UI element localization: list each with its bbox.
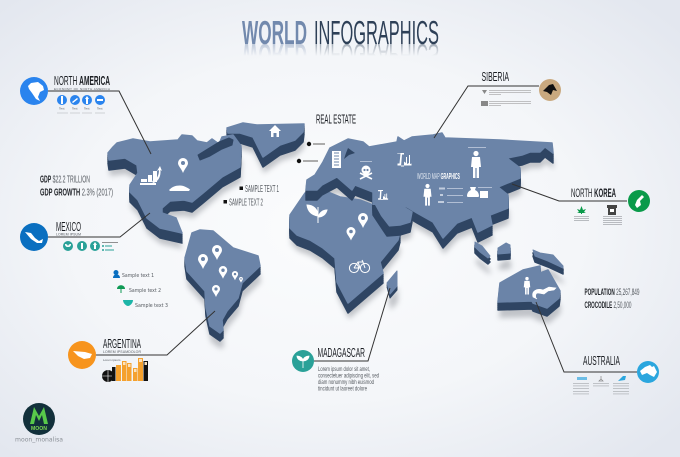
heading: MADAGASCAR <box>318 345 365 360</box>
stats: GDP <box>40 174 113 198</box>
icon: oil factory small <box>378 190 388 200</box>
icon: growth chart <box>140 166 162 185</box>
icon: shop <box>607 205 617 215</box>
paragraph: diam nonummy nibh euismod <box>318 379 374 386</box>
icon: Madagascar badge <box>292 350 314 372</box>
leader line <box>434 86 539 138</box>
icon: building <box>332 151 341 168</box>
landmass: Greenland <box>227 123 304 167</box>
mini text blocks <box>574 216 622 225</box>
mini labels: Text <box>97 106 103 110</box>
landmass: Madagascar <box>387 271 397 298</box>
text: REAL ESTATE <box>316 112 356 126</box>
legend: sample texts <box>113 270 168 309</box>
map tiny labels <box>360 147 492 203</box>
icon: North Korea badge <box>628 190 650 212</box>
mini icons <box>577 376 626 381</box>
stats: GDP: GDP $22.2 TRILLION <box>40 174 90 186</box>
icon: car <box>169 186 190 191</box>
icon: person medium <box>424 184 432 206</box>
mini icon glyphs <box>65 242 97 249</box>
paragraph: consectetuer adipiscing elit, sed <box>318 372 379 380</box>
mini labels: Text <box>59 106 65 110</box>
stats: GDP: GDP GROWTH 2.3% (2017) <box>40 188 113 198</box>
legend: sample texts: Sample text 1 <box>122 273 154 279</box>
mini legend <box>102 242 118 251</box>
subheading: ECONOMY OF NORTH AMERICA <box>54 87 110 91</box>
heading: NORTH AMERICA <box>54 74 110 88</box>
logo: moon_monalisa <box>15 403 63 444</box>
icon: money bags <box>467 187 488 198</box>
landmass: Africa <box>290 190 400 313</box>
icon: Australia badge <box>637 361 659 383</box>
title reflection: WORLD <box>242 37 307 74</box>
paragraph <box>318 366 379 392</box>
mini rules <box>57 112 105 114</box>
icon: location pins <box>178 158 368 297</box>
text: SAMPLE TEXT 1 <box>245 184 279 195</box>
text: INFOGRAPHICS <box>314 14 439 51</box>
landmass: Indonesian islands <box>475 242 563 274</box>
stats: Australia: CROCODILE 2,50,000 <box>584 300 632 310</box>
mini icons <box>57 95 105 105</box>
mini row 2 <box>481 101 531 106</box>
icon: person <box>113 270 120 278</box>
Baltic inlet <box>344 148 355 159</box>
bar chart <box>102 358 148 382</box>
leader line <box>96 311 215 355</box>
mini icon glyphs <box>61 96 103 104</box>
icon: person Australia <box>524 277 530 295</box>
heading: NORTH KOREA <box>571 186 616 200</box>
text: INFOGRAPHICS <box>314 37 439 74</box>
callout: Mexico <box>20 213 150 251</box>
mini text blocks <box>573 383 629 394</box>
callout: Argentina <box>68 311 215 382</box>
stats: Australia: POPULATION 25,267,849 <box>584 287 640 297</box>
leader line <box>314 288 390 361</box>
landmass: Eurasia <box>306 133 553 248</box>
icon: Mexico badge <box>20 223 48 251</box>
icon: cannabis leaf <box>577 206 586 214</box>
Red Sea <box>372 205 391 229</box>
heading: AUSTRALIA <box>583 354 620 368</box>
world map <box>108 123 564 349</box>
title <box>242 20 438 55</box>
icon: bicycle <box>349 260 370 273</box>
icon: house <box>269 125 281 137</box>
icon: Siberia badge <box>539 79 561 101</box>
leader line <box>536 302 637 372</box>
callout: Australia <box>536 302 659 394</box>
title reflection <box>244 44 438 55</box>
callout: North America <box>20 74 151 154</box>
mini icons <box>63 241 100 251</box>
sample labels <box>224 184 279 208</box>
logo: moon_monalisa: MOON <box>31 426 47 432</box>
mini labels: Text <box>72 106 78 110</box>
icon: Argentina badge <box>68 341 96 369</box>
paragraph: Lorem ipsum dolor sit amet, <box>318 366 370 373</box>
icon: teal shape <box>123 300 133 306</box>
real estate markers <box>297 142 325 163</box>
paragraph: tincidunt ut laoreet dolore <box>318 386 367 392</box>
landmass: North America <box>108 135 241 243</box>
callout: Madagascar <box>292 288 390 392</box>
bar chart: Lorem ipsum <box>103 358 121 362</box>
leader line <box>48 91 151 154</box>
icon: umbrella <box>117 285 125 293</box>
callout: North Korea <box>512 184 650 225</box>
icon: skull and crossbones <box>360 166 372 179</box>
mini labels: Text <box>84 106 90 110</box>
map shadow <box>109 139 564 349</box>
icon: person large <box>471 151 481 178</box>
callout: Siberia <box>434 69 561 138</box>
Hudson Bay <box>198 138 233 160</box>
heading: SIBERIA <box>482 69 509 84</box>
map icons <box>140 125 556 299</box>
leader line <box>512 184 627 201</box>
map label: world map graphics: WORLD MAP GRAPHICS <box>417 172 460 181</box>
icon: leaf sprout <box>307 205 327 223</box>
subheading: LOREM IPSUMDOLOR <box>103 350 141 354</box>
mini labels <box>59 106 103 110</box>
heading: ARGENTINA <box>103 337 141 351</box>
legend: sample texts: Sample text 3 <box>135 303 168 309</box>
logo: moon_monalisa: moon_monalisa <box>15 436 63 444</box>
leader line <box>48 213 150 237</box>
icon: North America badge <box>20 77 48 105</box>
legend: sample texts: Sample text 2 <box>129 288 161 294</box>
stats: Australia <box>584 287 640 310</box>
callout: Mexico: MEXICO <box>56 219 81 234</box>
title: WORLD <box>242 14 307 51</box>
icon: crocodile <box>533 287 556 299</box>
sample labels: SAMPLE TEXT 2 <box>229 198 263 208</box>
subheading: LOREM IPSUM <box>56 232 81 236</box>
icon: oil factory <box>397 153 412 166</box>
landmass: South America <box>185 230 260 341</box>
landmass: Australia <box>498 266 560 316</box>
mini row 1 <box>482 90 531 95</box>
